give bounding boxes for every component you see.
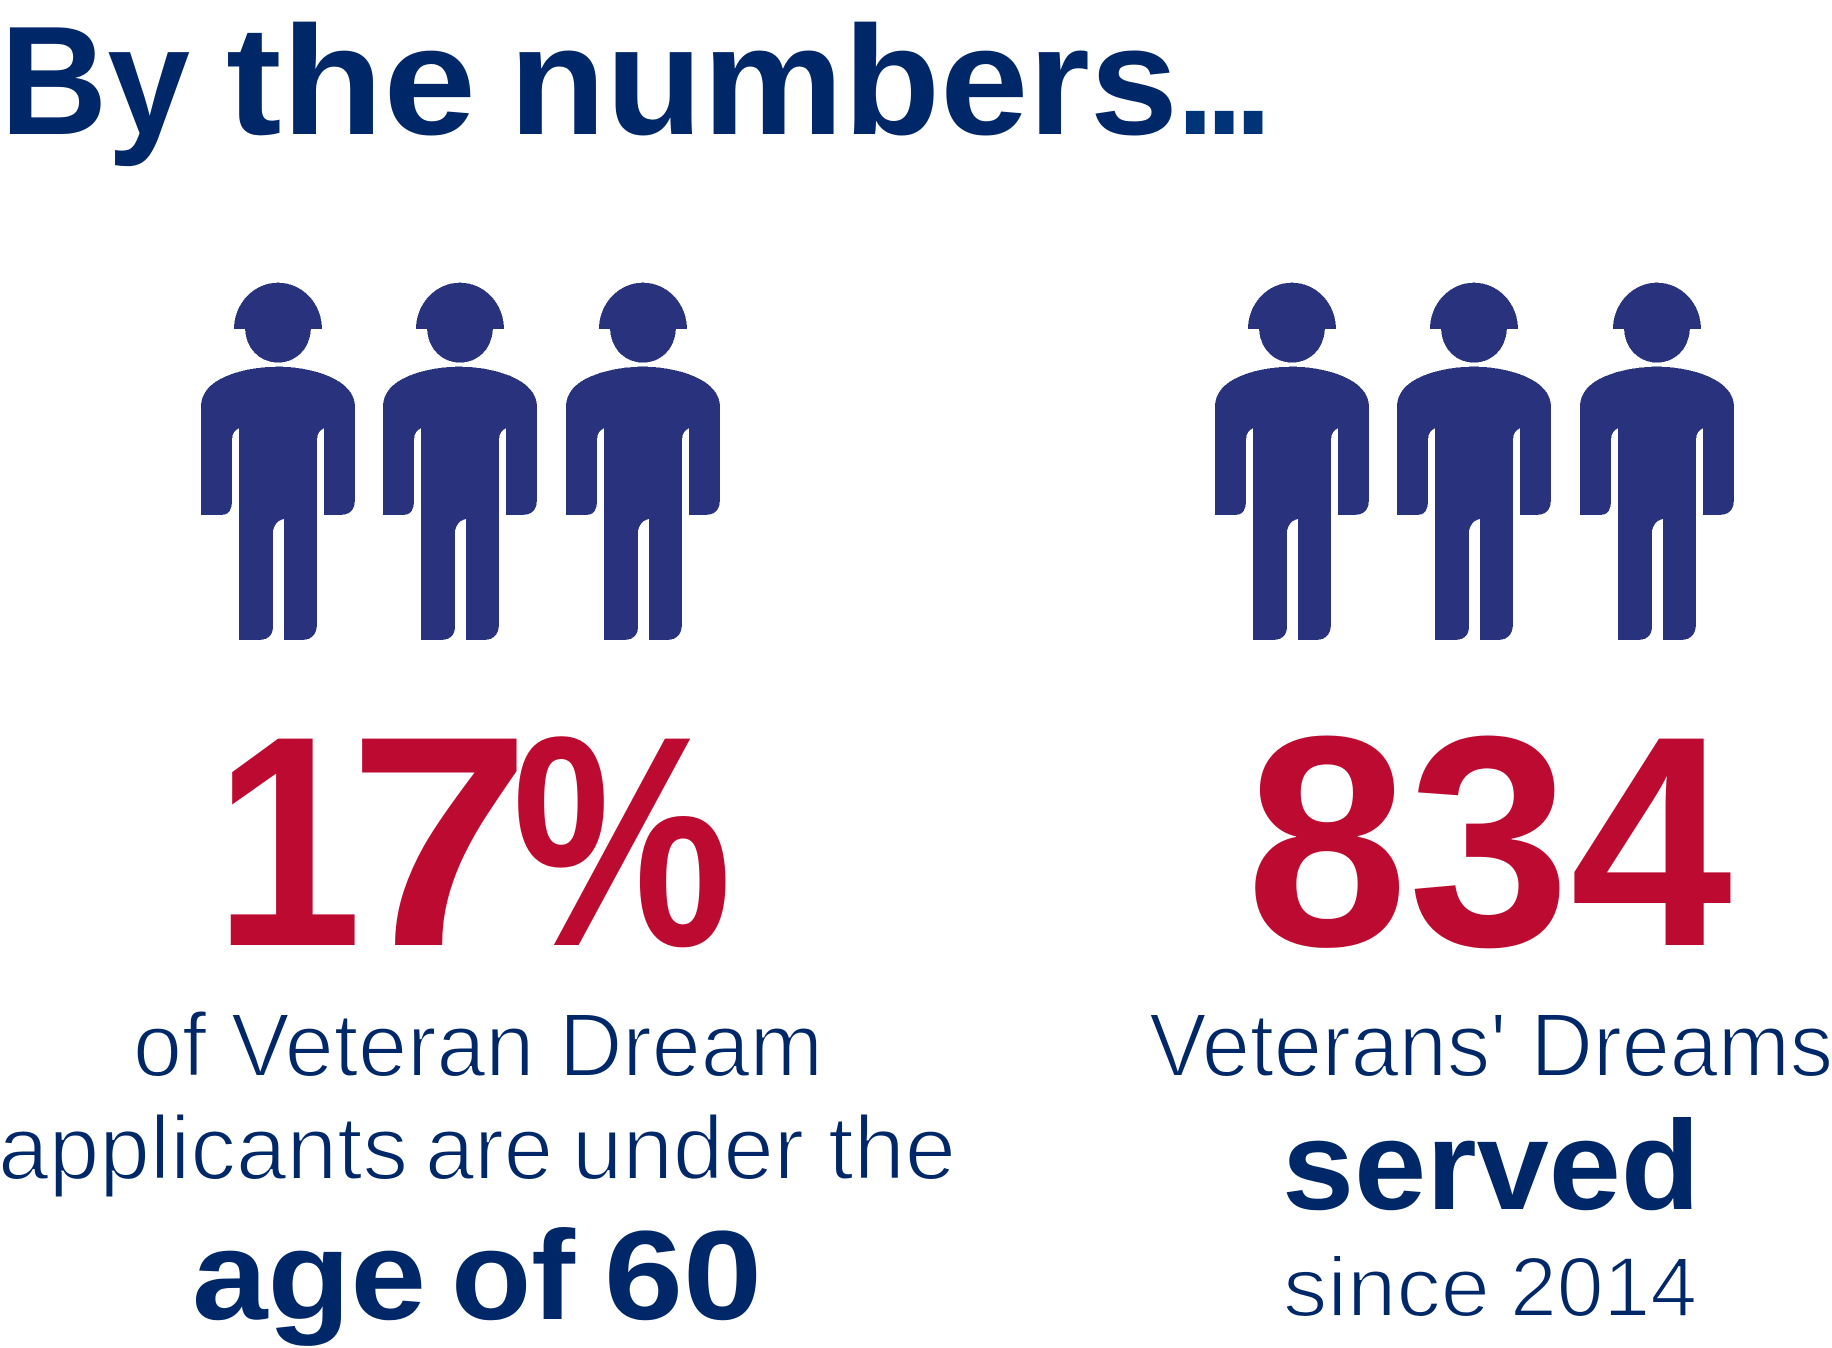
text block: left caption: of Veteran Dream xyxy=(133,996,823,1096)
big number: 17%: 1 xyxy=(214,673,362,1009)
text block: left caption xyxy=(0,996,956,1346)
text block: left caption: of xyxy=(451,1204,576,1346)
panel: left statistic xyxy=(0,283,956,1346)
icon group: three people, left xyxy=(201,283,720,640)
icon group: three people, right xyxy=(1215,283,1734,640)
text block: left caption: age xyxy=(192,1204,426,1346)
text block: right caption xyxy=(1149,996,1832,1334)
title xyxy=(0,0,1264,167)
text block: right caption: since xyxy=(1283,1240,1490,1334)
big number: 17%: 7 xyxy=(348,673,531,1009)
text block: left caption: 60 xyxy=(604,1204,762,1346)
text block: left caption: the xyxy=(828,1099,956,1199)
text block: left caption: under xyxy=(572,1099,804,1199)
big number: 834: 834 xyxy=(1246,673,1734,1009)
big number: 17%: % xyxy=(512,673,732,1009)
text block: right caption: served xyxy=(1282,1094,1700,1236)
panel: right statistic xyxy=(1149,283,1832,1334)
text block: right caption: 2014 xyxy=(1510,1240,1697,1334)
title: ... xyxy=(1177,0,1264,167)
text block: left caption: applicants xyxy=(0,1099,408,1199)
text block: left caption: are xyxy=(425,1099,553,1199)
big number: 17% xyxy=(214,673,732,1009)
